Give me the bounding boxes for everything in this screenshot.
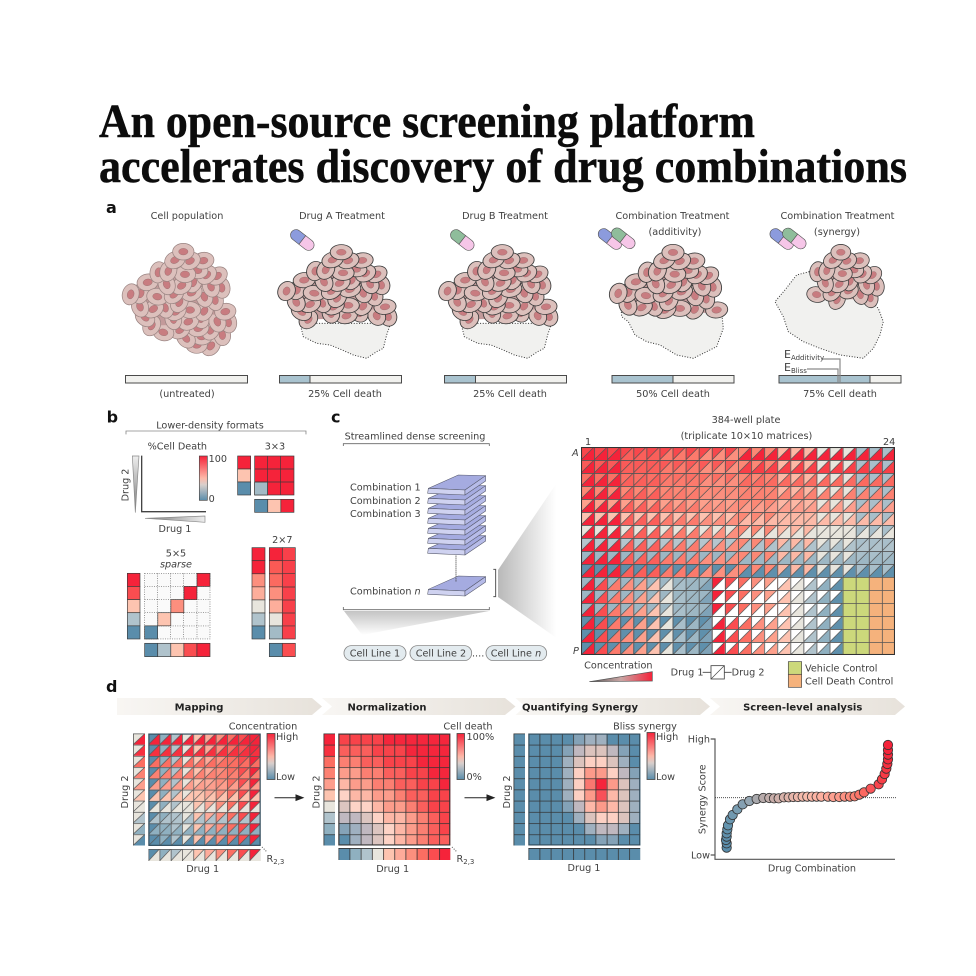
- concentration legend: Cell Death Control: [805, 676, 893, 687]
- screen-level synergy chart: [688, 734, 896, 875]
- combination synergy: Combination Treatment: [781, 211, 895, 222]
- normalization heatmap: R: [456, 854, 463, 865]
- drug B treatment: [436, 211, 566, 400]
- concentration legend: Drug 2: [732, 668, 765, 679]
- axis schematic: 0: [209, 494, 215, 505]
- 384-well plate heading: 1: [585, 437, 591, 448]
- 3x3 format: [238, 441, 294, 512]
- 384-well plate heading: (triplicate 10×10 matrices): [681, 431, 812, 442]
- normalization drug 1 strip: [338, 848, 450, 860]
- normalization heatmap: 0%: [466, 772, 482, 783]
- concentration legend: [584, 661, 893, 687]
- plate stack: [428, 475, 496, 597]
- axis schematic: Drug 2: [120, 469, 131, 501]
- 384-well plate: [581, 447, 895, 655]
- 384-well plate heading: P: [573, 646, 579, 657]
- synergy heatmap: Low: [656, 772, 675, 783]
- drug B treatment: Drug B Treatment: [462, 211, 548, 222]
- combination synergy: E: [784, 361, 791, 374]
- axis schematic: %Cell Death: [148, 441, 207, 452]
- combination synergy: Additivity: [791, 354, 824, 362]
- panel b: lower-density formats: b: [107, 407, 118, 426]
- panel b: lower-density formats: Lower-density formats: [156, 420, 264, 431]
- drug A treatment: Drug A Treatment: [299, 211, 385, 222]
- axis schematic: 100: [209, 454, 227, 465]
- synergy heatmap: Drug 2: [502, 776, 513, 808]
- pipeline banner: Normalization: [348, 702, 426, 714]
- 384-well plate heading: [571, 415, 895, 657]
- title: accelerates discovery of drug combinations: [99, 140, 907, 193]
- zoom shading wedges: [344, 447, 581, 655]
- panel c: dense screening stack: Combination 3: [350, 509, 421, 520]
- arrow: mapping to normalization: [274, 795, 303, 800]
- 5x5 sparse format: [127, 549, 210, 657]
- mapping drug 1 strip: [148, 849, 261, 861]
- cell line pills: Cell Line n: [491, 648, 541, 659]
- panel c: dense screening stack: Combination 2: [350, 496, 421, 507]
- 384-well plate heading: A: [571, 448, 579, 459]
- cell population: [120, 211, 248, 400]
- mapping heatmap: Drug 1: [186, 864, 219, 875]
- cell population: (untreated): [159, 389, 215, 400]
- normalization heatmap: Drug 2: [312, 776, 322, 808]
- normalization heatmap: 2,3: [463, 858, 474, 866]
- 384-well plate heading: 24: [883, 437, 895, 448]
- 2x7 format: 2×7: [272, 535, 293, 546]
- 5x5 sparse format: 5×5: [166, 549, 186, 560]
- concentration legend: Concentration: [584, 661, 652, 672]
- combination synergy: [768, 211, 901, 400]
- synergy drug 1 strip: [528, 848, 640, 860]
- panel d: pipeline: [106, 677, 905, 875]
- mapping heatmap: Drug 2: [120, 776, 131, 808]
- synergy heatmap: Bliss synergy: [613, 722, 677, 732]
- arrow: normalization to synergy: [464, 795, 494, 800]
- 384-well plate heading: 384-well plate: [712, 415, 780, 426]
- title: An open-source screening platform: [99, 95, 755, 148]
- combination additivity: Combination Treatment: [616, 211, 730, 222]
- normalization heatmap: 100%: [466, 732, 494, 743]
- normalization heatmap: Drug 1: [376, 864, 409, 875]
- screen-level synergy chart: Low: [691, 850, 710, 861]
- combination synergy: 75% Cell death: [803, 389, 877, 400]
- 5x5 sparse format: sparse: [160, 560, 192, 571]
- 3x3 format: 3×3: [265, 441, 285, 452]
- panel c: dense screening stack: Combination 1: [350, 483, 421, 494]
- synergy drug 2 strip: [514, 734, 525, 846]
- pipeline banner: Screen-level analysis: [743, 702, 862, 714]
- pipeline banner: Mapping: [175, 702, 223, 714]
- combination additivity: (additivity): [649, 227, 701, 238]
- mapping heatmap: 2,3: [273, 858, 284, 866]
- concentration legend: Vehicle Control: [805, 664, 877, 675]
- combination additivity: [596, 211, 734, 400]
- synergy grid: [528, 734, 640, 846]
- pipeline banner: [117, 698, 905, 715]
- panel d: pipeline: d: [106, 677, 117, 696]
- cell line pills: [344, 646, 547, 661]
- drug B treatment: 25% Cell death: [473, 389, 547, 400]
- concentration legend: Drug 1: [671, 668, 704, 679]
- axis schematic: Drug 1: [159, 524, 191, 535]
- screen-level synergy chart: Drug Combination: [768, 864, 856, 875]
- synergy score points: [721, 740, 893, 852]
- cell line pills: Cell Line 1: [350, 648, 400, 659]
- combination synergy: E: [784, 348, 791, 361]
- panel a: treatments: a: [106, 198, 117, 217]
- cell line pills: Cell Line 2: [416, 648, 466, 659]
- panel c: dense screening stack: Streamlined dense screening: [345, 431, 485, 442]
- mapping heatmap: [120, 722, 298, 875]
- mapping heatmap: Concentration: [229, 722, 297, 732]
- pipeline banner: Quantifying Synergy: [522, 702, 638, 714]
- screen-level synergy chart: High: [688, 734, 710, 745]
- drug A treatment: [275, 211, 402, 400]
- mapping heatmap: Low: [276, 772, 295, 783]
- synergy heatmap: High: [656, 732, 678, 743]
- combination synergy: (synergy): [814, 227, 860, 238]
- screen-level synergy chart: Synergy Score: [698, 764, 709, 834]
- panel c: dense screening stack: c: [331, 408, 340, 427]
- combination additivity: 50% Cell death: [636, 389, 710, 400]
- cell line pills: ....: [472, 648, 484, 659]
- panel b: lower-density formats: [107, 407, 306, 657]
- mapping heatmap: R: [266, 854, 273, 865]
- mapping heatmap: High: [276, 732, 298, 743]
- mapping drug 2 strip: [133, 734, 145, 846]
- 2x7 format: [252, 535, 295, 657]
- panel a: treatments: [106, 198, 901, 400]
- synergy heatmap: Drug 1: [568, 863, 600, 874]
- drug A treatment: 25% Cell death: [308, 389, 382, 400]
- combination synergy: Bliss: [791, 367, 807, 375]
- mapping grid: [148, 734, 261, 846]
- title: [99, 95, 907, 193]
- normalization heatmap: Cell death: [443, 722, 493, 732]
- synergy heatmap: [502, 722, 678, 874]
- panel c: dense screening stack: [331, 408, 895, 687]
- axis schematic: [120, 441, 227, 535]
- normalization grid: [338, 734, 450, 846]
- normalization drug 2 strip: [324, 734, 335, 846]
- normalization heatmap: [312, 722, 494, 875]
- panel c: dense screening stack: Combination n: [350, 586, 421, 597]
- cell population: Cell population: [151, 211, 223, 222]
